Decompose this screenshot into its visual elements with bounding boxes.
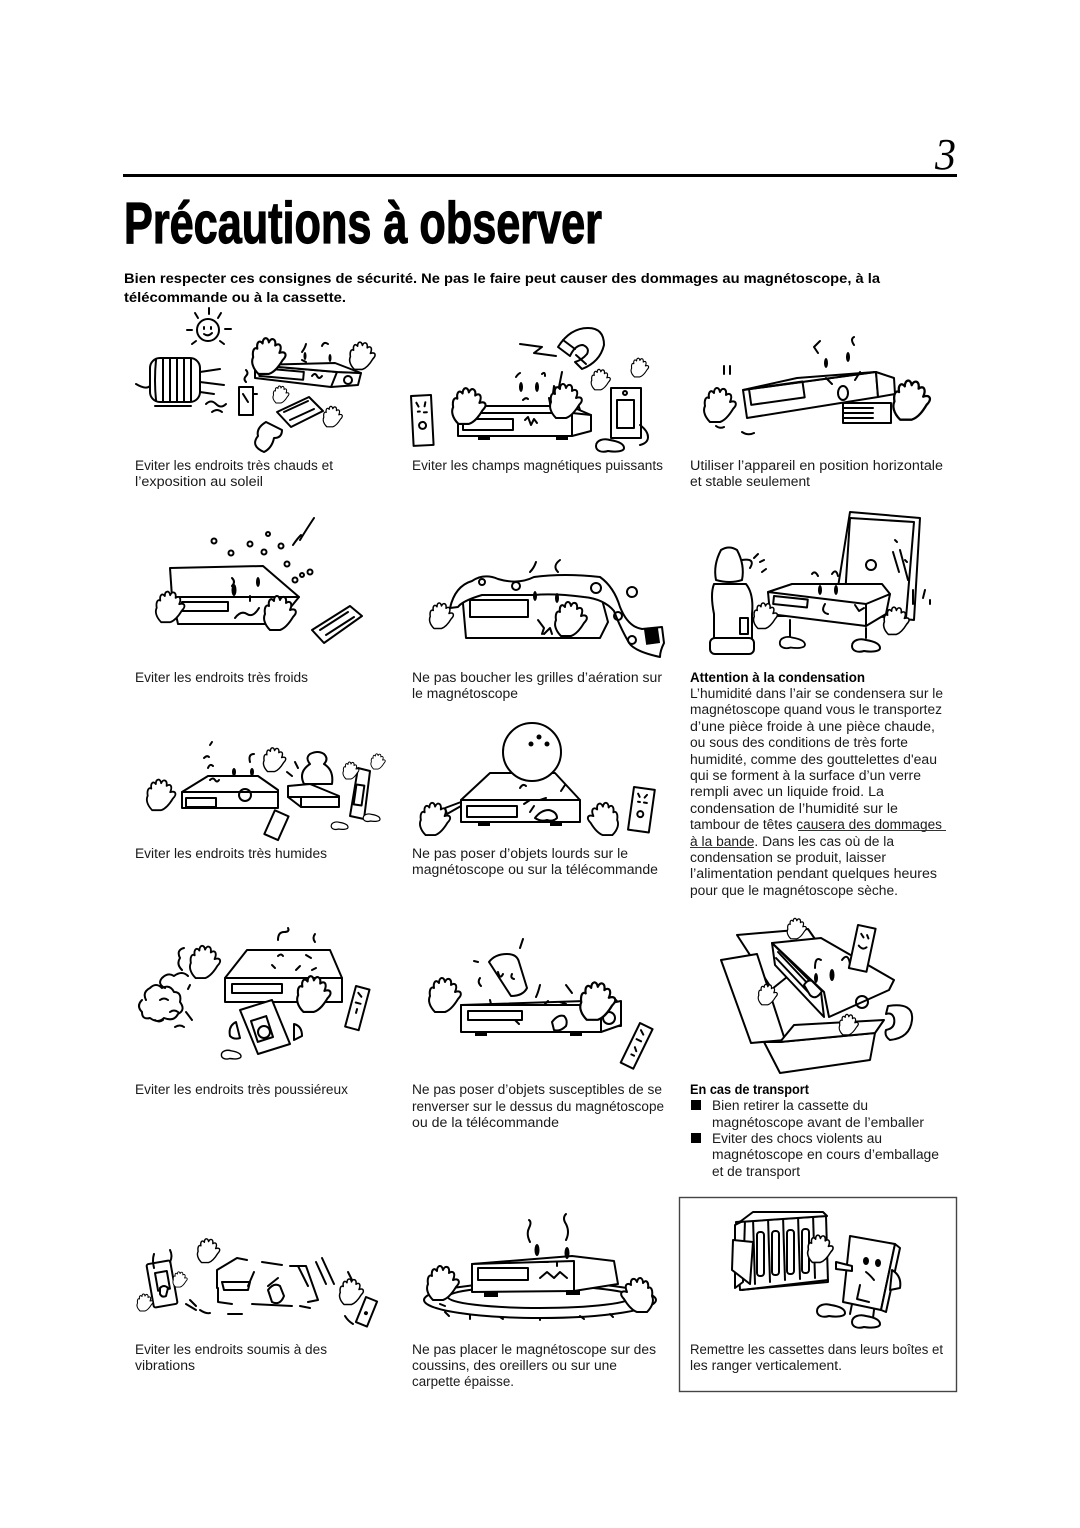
caption: [135, 458, 333, 489]
caption: vibrations: [135, 1358, 195, 1373]
caption: Eviter les endroits très chauds et: [135, 458, 333, 473]
heading and paragraph: humidité, comme des gouttelettes d'eau: [690, 752, 937, 767]
header rule: [123, 174, 957, 177]
box border: [680, 1198, 956, 1392]
title: Précautions à observer: [124, 191, 602, 256]
heading and paragraph: qui se forment à la surface d’un verre: [690, 768, 921, 783]
icon: dusty VCR and cassette: [139, 928, 370, 1059]
caption: [135, 1342, 327, 1373]
heading and paragraph: pour que le magnétoscope sèche.: [690, 883, 898, 898]
icon: shaking VCR, cassette and remote: [137, 1239, 377, 1327]
intro text: télécommande ou à la cassette.: [124, 290, 346, 305]
caption: carpette épaisse.: [412, 1374, 514, 1389]
panel: cold places: [135, 518, 362, 685]
heading and paragraph: ou sous des conditions de très forte: [690, 735, 908, 750]
heading and bullets: Eviter des chocs violents au: [712, 1131, 882, 1146]
heading and bullets: Bien retirer la cassette du: [712, 1098, 868, 1113]
icon: thermos, open door and VCR: [710, 512, 930, 654]
icon: VCR under blanket: [430, 560, 664, 657]
heading and paragraph: à la bande. Dans les cas où de la: [690, 834, 894, 849]
panel: vibrations: [135, 1239, 377, 1373]
caption: et stable seulement: [690, 474, 810, 489]
caption: ou de la télécommande: [412, 1115, 559, 1130]
panel: hot places: [135, 308, 375, 489]
caption: [412, 670, 663, 701]
intro text: Bien respecter ces consignes de sécurité. Ne pas le faire peut causer des dommages au magnétoscope, à la: [124, 271, 881, 286]
caption: Ne pas poser d’objets lourds sur le: [412, 846, 628, 861]
caption: Eviter les endroits très froids: [135, 670, 308, 685]
caption: [412, 1082, 664, 1130]
heading and paragraph: condensation de l’humidité sur le: [690, 801, 898, 816]
panel: humid places: [135, 742, 385, 861]
heading and bullets: En cas de transport: [690, 1082, 809, 1097]
caption: Eviter les champs magnétiques puissants: [412, 458, 663, 473]
icon: tilted VCR propped on books: [704, 337, 930, 434]
heading and paragraph: Attention à la condensation: [690, 670, 865, 685]
heading and paragraph: L’humidité dans l’air se condensera sur le: [690, 686, 943, 701]
heading and paragraph: tambour de têtes causera des dommages: [690, 817, 942, 832]
caption: [412, 846, 658, 877]
heading and bullets: magnétoscope avant de l’emballer: [712, 1115, 925, 1130]
heading and paragraph: d’une pièce froide à une pièce chaude,: [690, 719, 935, 734]
caption: Remettre les cassettes dans leurs boîtes et: [690, 1342, 943, 1357]
caption: [690, 1342, 943, 1373]
panel: dusty places: [135, 928, 370, 1097]
caption: Ne pas poser d’objets susceptibles de se: [412, 1082, 662, 1097]
heading and paragraph: [690, 670, 946, 898]
heading and paragraph: condensation se produit, laisser: [690, 850, 887, 865]
panel: cassette storage box: [680, 1198, 956, 1392]
heading and paragraph: l’alimentation pendant quelques heures: [690, 866, 937, 881]
heading and bullets: magnétoscope en cours d’emballage: [712, 1147, 939, 1162]
heading and paragraph: rempli avec un liquide froid. La: [690, 784, 885, 799]
caption: renverser sur le dessus du magnétoscope: [412, 1099, 664, 1114]
icon: bowling ball on VCR: [420, 723, 655, 835]
panel: horizontal position: [690, 337, 943, 489]
caption: l’exposition au soleil: [135, 474, 263, 489]
icon: stored cassettes and cassette character: [732, 1212, 900, 1328]
caption: les ranger verticalement.: [690, 1358, 842, 1373]
caption: Ne pas placer le magnétoscope sur des: [412, 1342, 656, 1357]
panel: transport: [690, 918, 939, 1179]
icon: shivering VCR and snow: [156, 518, 362, 643]
page number: 3: [934, 130, 956, 179]
heading and bullets: [690, 1082, 939, 1179]
caption: le magnétoscope: [412, 686, 518, 701]
caption: magnétoscope ou sur la télécommande: [412, 862, 658, 877]
caption: coussins, des oreillers ou sur une: [412, 1358, 617, 1373]
icon: spilled cup on VCR: [429, 939, 653, 1069]
icon: sun, heater and overheated devices: [136, 308, 375, 452]
panel: condensation: [690, 512, 946, 898]
panel: magnetic fields: [411, 328, 663, 473]
icon: magnet, VCR, remote and cassette: [411, 328, 649, 452]
caption: Eviter les endroits très poussiéreux: [135, 1082, 348, 1097]
panel: spillable objects: [412, 939, 664, 1130]
caption: [412, 1342, 656, 1389]
caption: Ne pas boucher les grilles d’aération sur: [412, 670, 663, 685]
panel: ventilation: [412, 560, 664, 701]
caption: Utiliser l’appareil en position horizontale: [690, 458, 943, 473]
heading and paragraph: magnétoscope quand vous le transportez: [690, 702, 942, 717]
panel: soft surfaces: [412, 1214, 656, 1389]
caption: Eviter les endroits très humides: [135, 846, 327, 861]
caption: [690, 458, 943, 489]
caption: Eviter les endroits soumis à des: [135, 1342, 327, 1357]
intro text: [124, 271, 881, 305]
icon: humid VCR, kettle, cassette and remote: [147, 742, 385, 840]
heading and bullets: et de transport: [712, 1164, 800, 1179]
icon: VCR in cardboard box: [721, 918, 912, 1073]
panel: heavy objects: [412, 723, 658, 877]
icon: VCR on cushion: [424, 1214, 656, 1320]
